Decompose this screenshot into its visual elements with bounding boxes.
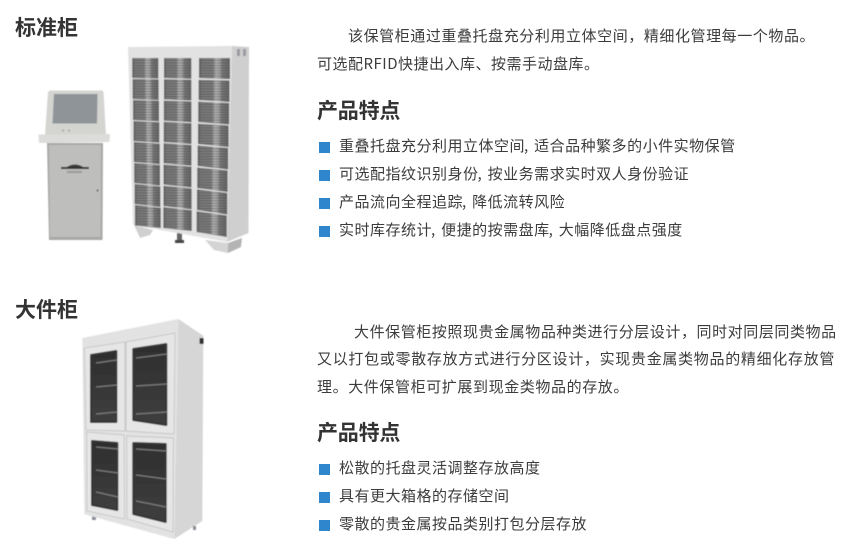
bullet text: 实时库存统计,便捷的按需盘库,大幅降低盘点强度 [339,219,683,240]
bullet marker [319,492,330,503]
bullet text: 具有更大箱格的存储空间 [339,485,510,506]
kiosk screen housing [45,90,106,135]
heading: 标准柜: 标准柜 [15,12,78,42]
cabinet front [128,46,232,242]
printer slot [61,167,89,169]
cabinet feet [134,225,153,238]
bullet marker [319,142,330,153]
text block: 大件柜 intro line 2: 又以打包或零散存放方式进行分区设计，实现贵金属类物品的精细化存放管 [317,348,835,369]
bullet marker [319,170,330,181]
text block: 标准柜 intro: 该保管柜通过重叠托盘充分利用立体空间，精细化管理每一个物品。 [348,25,815,46]
heading: 大件柜: 大件柜 [15,294,78,324]
bullet text: 零散的贵金属按品类别打包分层存放 [339,513,587,534]
bullet text: 可选配指纹识别身份,按业务需求实时双人身份验证 [339,163,689,184]
icon: standard stacked-tray cabinet [128,46,249,253]
bullet marker [319,520,330,531]
heading: 产品特点: 产品特点 [317,95,400,125]
shelves [96,354,167,507]
large cabinet front [82,319,178,539]
bullet marker [319,198,330,209]
text block: 大件柜 intro line 1: 大件保管柜按照现贵金属物品种类进行分层设计，同时对同层同类物品 [354,321,837,342]
kiosk screen [52,94,98,124]
kiosk body [47,143,103,240]
bullet marker [319,464,330,475]
bullet text: 松散的托盘灵活调整存放高度 [339,457,541,478]
door outlines [84,333,175,532]
text block: 大件柜 intro line 3: 理。大件保管柜可扩展到现金类物品的存放。 [317,376,629,397]
heading: 产品特点: 产品特点 [317,417,400,447]
large cabinet side [174,319,203,539]
bullet marker [319,226,330,237]
bullet text: 产品流向全程追踪,降低流转风险 [339,191,565,212]
kiosk shelf [38,134,110,143]
bullet text: 重叠托盘充分利用立体空间,适合品种繁多的小件实物保管 [339,135,736,156]
icon: touch-screen kiosk [38,90,110,240]
icon: large glass-door cabinet [82,319,204,539]
door windows [91,344,166,522]
tray cells [132,58,230,237]
large cabinet feet [92,515,96,520]
text block: 标准柜 intro line 2: 可选配RFID快捷出入库、按需手动盘库。 [317,53,600,74]
cabinet side [227,46,249,242]
